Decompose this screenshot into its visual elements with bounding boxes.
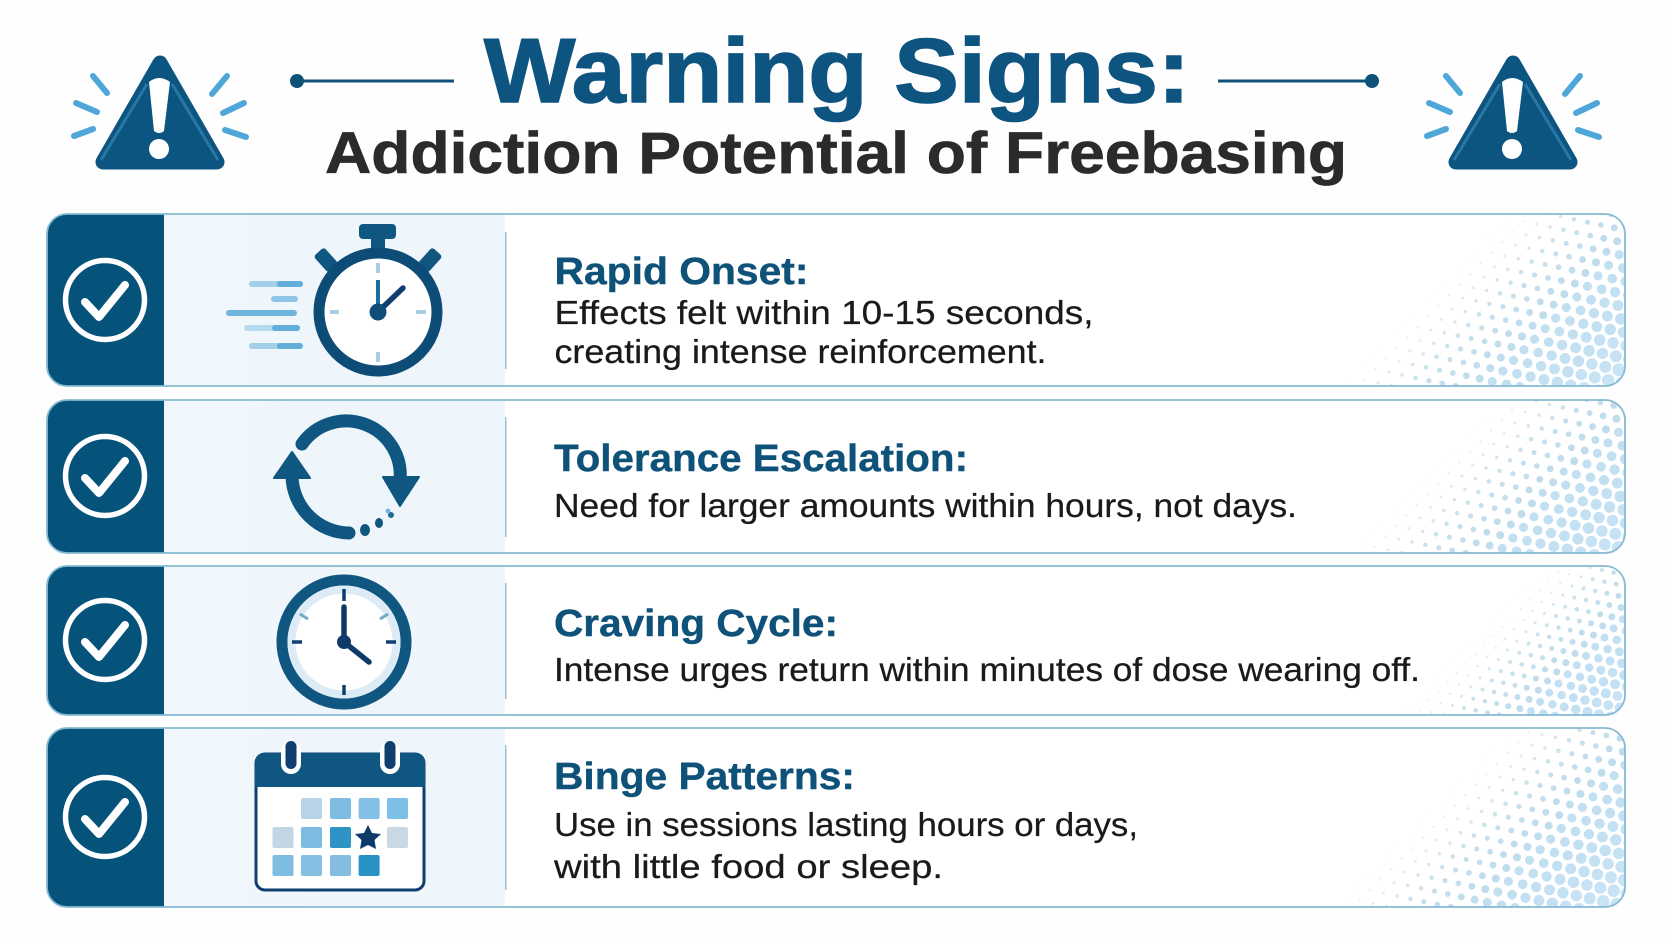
subtitle: Addiction Potential of Freebasing (325, 121, 1347, 186)
icon: calendar (255, 741, 425, 890)
heading: rapid onset: Rapid Onset: (554, 251, 808, 293)
decorative connector right (1218, 74, 1379, 88)
icon: check badge (66, 260, 144, 340)
text block: craving cycle: Intense urges return within minutes of dose wearing off. (554, 651, 1420, 688)
text block: rapid onset line 1: Effects felt within 10-15 seconds, (554, 294, 1094, 331)
icon: warning triangle left (74, 63, 246, 162)
icon: warning triangle right (1427, 63, 1599, 162)
heading: binge patterns: Binge Patterns: (554, 756, 855, 798)
text block: rapid onset line 2: creating intense reinforcement. (554, 333, 1046, 370)
icon: check badge (66, 778, 144, 856)
heading: tolerance escalation: Tolerance Escalation: (554, 438, 968, 480)
text block: tolerance escalation: Need for larger amounts within hours, not days. (554, 487, 1297, 524)
icon: stopwatch with speed lines (229, 224, 443, 371)
text block: binge patterns line 1: Use in sessions lasting hours or days, (554, 806, 1138, 843)
title: Warning Signs: (484, 21, 1190, 122)
icon: cycle arrows (274, 421, 419, 536)
icon: clock (282, 580, 406, 704)
panel: rapid onset (46, 213, 1626, 387)
panel: binge patterns (46, 727, 1626, 908)
panel: craving cycle (46, 565, 1626, 716)
heading: craving cycle: Craving Cycle: (554, 603, 838, 645)
decorative connector left (290, 74, 454, 88)
icon: check badge (66, 600, 144, 680)
icon: check badge (66, 436, 144, 516)
panel: tolerance escalation (46, 399, 1626, 554)
text block: binge patterns line 2: with little food or sleep. (553, 848, 943, 885)
